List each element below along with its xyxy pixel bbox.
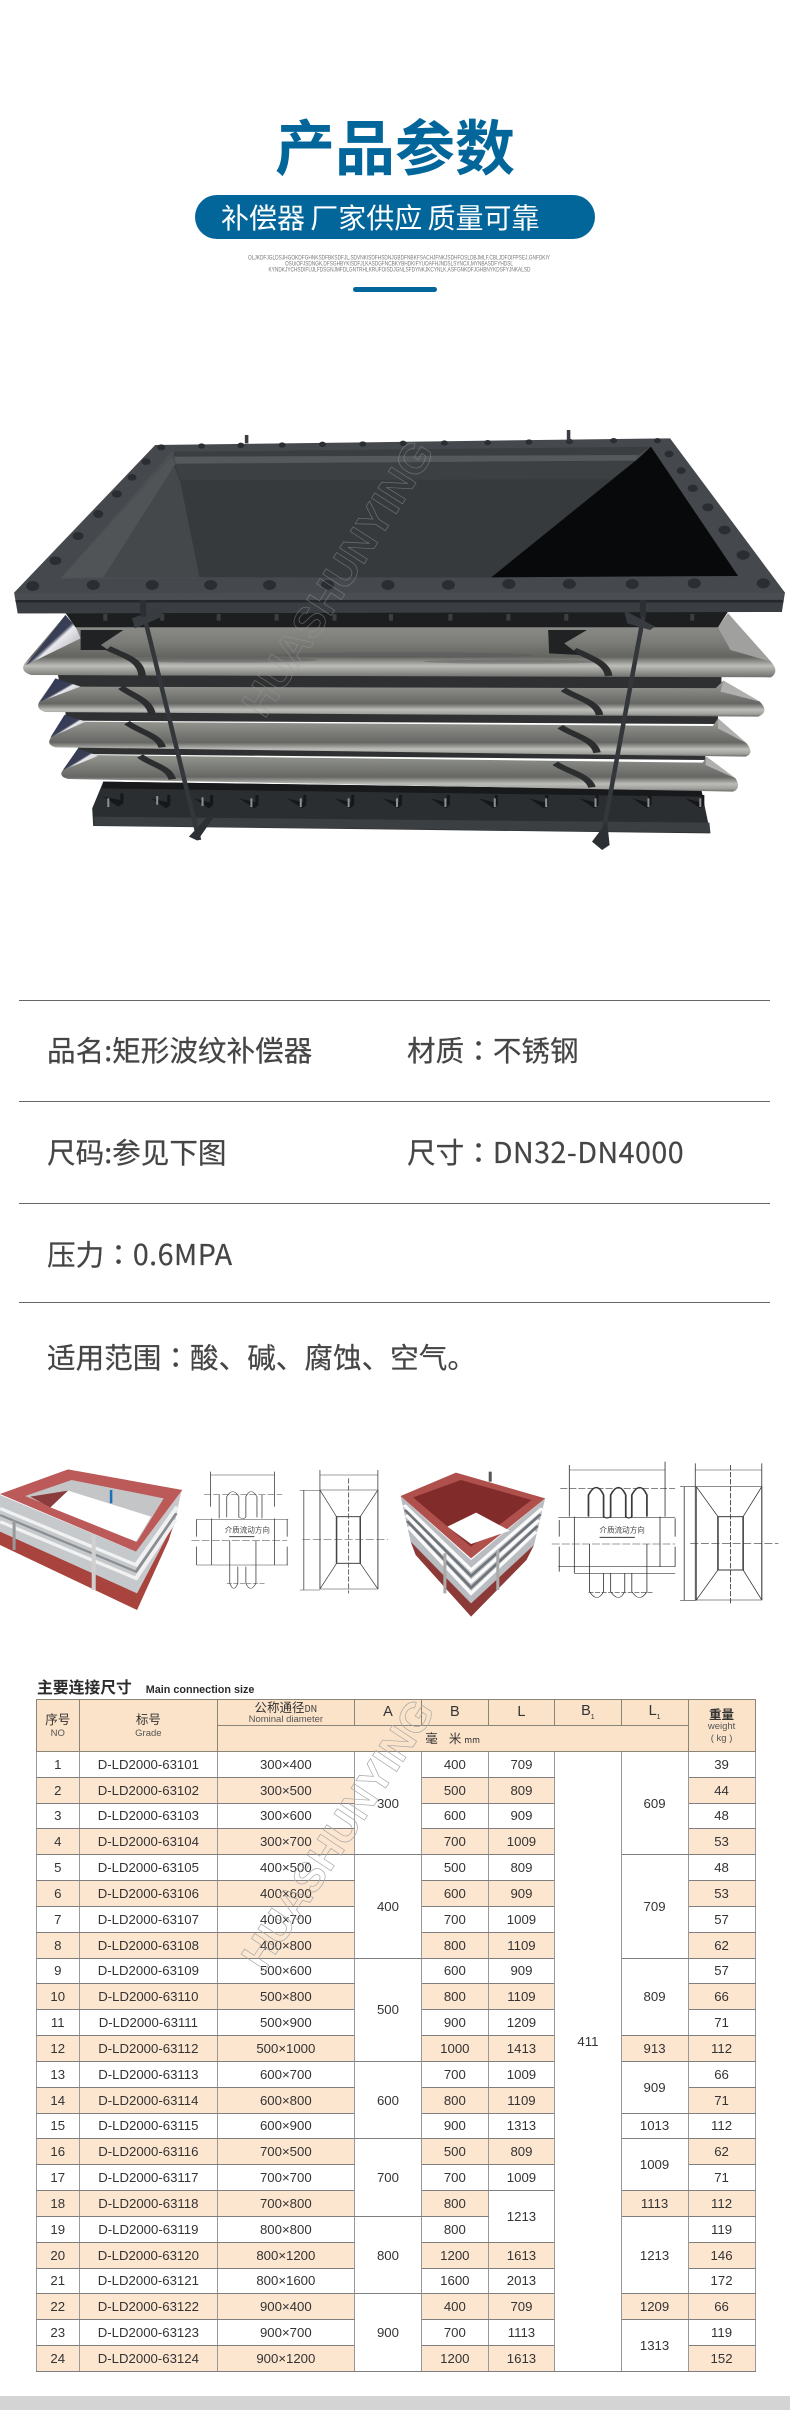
glossy corner reflections bbox=[26, 615, 81, 665]
table body: 1109 bbox=[507, 1989, 536, 2004]
table body: 23 bbox=[50, 2325, 65, 2340]
table body: 14 bbox=[50, 2093, 65, 2108]
table body: D-LD2000-63121 bbox=[98, 2273, 199, 2288]
table body: 13 bbox=[50, 2067, 65, 2082]
collar with bolts bbox=[64, 612, 728, 627]
table body: 500 bbox=[444, 1783, 466, 1798]
table body: 1109 bbox=[507, 2093, 536, 2108]
table body: D-LD2000-63103 bbox=[98, 1808, 199, 1823]
table body: 112 bbox=[711, 2118, 732, 2133]
table body: 700 bbox=[444, 2170, 466, 2185]
table body: 809 bbox=[644, 1989, 666, 2004]
table body: 400×700 bbox=[260, 1912, 312, 1927]
table header: ( kg ) bbox=[711, 1733, 732, 1744]
table header: 标号 bbox=[136, 1709, 161, 1728]
table body: 500×800 bbox=[260, 1989, 312, 2004]
drawing: flange view (left) bbox=[300, 1470, 388, 1593]
table body: 112 bbox=[711, 2196, 732, 2211]
table body: 2 bbox=[54, 1783, 61, 1798]
table body: 411 bbox=[577, 2034, 598, 2049]
table body: D-LD2000-63111 bbox=[99, 2015, 198, 2030]
table body: 66 bbox=[714, 1989, 729, 2004]
small decorative caption bbox=[248, 254, 550, 274]
table body: 1009 bbox=[507, 1912, 536, 1927]
table body: D-LD2000-63109 bbox=[98, 1963, 199, 1978]
table body: D-LD2000-63113 bbox=[98, 2067, 198, 2082]
table body: 39 bbox=[714, 1757, 729, 1772]
table body: 1200 bbox=[440, 2351, 470, 2366]
table body: 800 bbox=[444, 2222, 466, 2237]
table body: D-LD2000-63105 bbox=[98, 1860, 199, 1875]
upper flange face bbox=[14, 438, 785, 613]
table body: D-LD2000-63106 bbox=[98, 1886, 199, 1901]
spec: pressure: 压力：0.6MPA bbox=[47, 1233, 233, 1274]
table body: 1313 bbox=[640, 2338, 669, 2353]
table body: 800×1200 bbox=[256, 2248, 315, 2263]
table body: 15 bbox=[50, 2118, 65, 2133]
table body: 300×400 bbox=[260, 1757, 312, 1772]
table body: D-LD2000-63110 bbox=[98, 1989, 198, 2004]
table body: 112 bbox=[711, 2041, 732, 2056]
lower flange bbox=[92, 782, 710, 833]
table body: 800×1600 bbox=[256, 2273, 315, 2288]
table header: B1 bbox=[581, 1703, 595, 1721]
table body: 1009 bbox=[507, 2067, 536, 2082]
spec: product name: 品名:矩形波纹补偿器 bbox=[47, 1029, 312, 1070]
bellows convolutions bbox=[23, 613, 775, 792]
table header bbox=[37, 1700, 755, 1751]
table body: 66 bbox=[714, 2299, 729, 2314]
table body: 609 bbox=[644, 1796, 666, 1811]
table body: D-LD2000-63114 bbox=[98, 2093, 198, 2108]
table body: 24 bbox=[50, 2351, 65, 2366]
table body: 700 bbox=[444, 1912, 466, 1927]
table body: 1 bbox=[54, 1757, 61, 1772]
table body: 400×600 bbox=[260, 1886, 312, 1901]
table body: 800 bbox=[444, 2093, 466, 2108]
photo: wide red compensator bbox=[0, 1469, 182, 1610]
table body: 1209 bbox=[507, 2015, 536, 2030]
table body: 5 bbox=[54, 1860, 61, 1875]
table body: 300×600 bbox=[260, 1808, 312, 1823]
table body: 1213 bbox=[507, 2209, 536, 2224]
table body: 2013 bbox=[507, 2273, 536, 2288]
table body: 1413 bbox=[507, 2041, 536, 2056]
table body: 71 bbox=[714, 2015, 729, 2030]
table body: 400 bbox=[377, 1899, 399, 1914]
watermark on table: HUASHUNYING bbox=[232, 1691, 444, 1977]
table body: 1313 bbox=[507, 2118, 536, 2133]
table body: 900×400 bbox=[260, 2299, 312, 2314]
table body: 909 bbox=[510, 1808, 532, 1823]
table header: Grade bbox=[135, 1728, 162, 1738]
table body: 1600 bbox=[440, 2273, 470, 2288]
table body: 11 bbox=[51, 2015, 65, 2030]
table body: D-LD2000-63123 bbox=[98, 2325, 199, 2340]
table body: 62 bbox=[714, 1938, 729, 1953]
table body: 1000 bbox=[440, 2041, 470, 2056]
table body: 700 bbox=[377, 2170, 399, 2185]
pill text: 补偿器 厂家供应 质量可靠 bbox=[221, 197, 540, 237]
table body: 700 bbox=[444, 2067, 466, 2082]
table header: 毫 米 mm bbox=[425, 1728, 480, 1747]
table body: 10 bbox=[50, 1989, 65, 2004]
table body: D-LD2000-63102 bbox=[98, 1783, 199, 1798]
table body: 19 bbox=[50, 2222, 65, 2237]
table body: 909 bbox=[510, 1963, 532, 1978]
table header: Nominal diameter bbox=[249, 1714, 323, 1725]
photo: tall red compensator bbox=[401, 1472, 545, 1617]
table body: 900 bbox=[444, 2015, 466, 2030]
table body: 1200 bbox=[440, 2248, 470, 2263]
table body: 53 bbox=[714, 1886, 729, 1901]
table body: 700×500 bbox=[260, 2144, 312, 2159]
table body: 1113 bbox=[641, 2196, 668, 2211]
table body: D-LD2000-63116 bbox=[98, 2144, 198, 2159]
table header: weight bbox=[708, 1721, 735, 1732]
table body: 300 bbox=[377, 1796, 399, 1811]
table body: 800 bbox=[444, 2196, 466, 2211]
table body: 48 bbox=[714, 1860, 729, 1875]
divider lines bbox=[19, 1000, 770, 1303]
table body: 71 bbox=[714, 2093, 729, 2108]
table body: 300×700 bbox=[260, 1834, 312, 1849]
table body: D-LD2000-63117 bbox=[98, 2170, 198, 2185]
label: medium flow direction (left): 介质流动方向 bbox=[225, 1524, 270, 1535]
table body: 900 bbox=[377, 2325, 399, 2340]
table body: 600×800 bbox=[260, 2093, 312, 2108]
accent bar bbox=[353, 287, 437, 292]
table body: 500×1000 bbox=[256, 2041, 315, 2056]
table body bbox=[37, 1757, 755, 2371]
table header: B bbox=[450, 1704, 460, 1720]
table body: 909 bbox=[644, 2080, 666, 2095]
table body: 1209 bbox=[640, 2299, 669, 2314]
table body: 48 bbox=[714, 1808, 729, 1823]
table body: 809 bbox=[510, 1860, 532, 1875]
table body: 700 bbox=[444, 2325, 466, 2340]
bottom grey band bbox=[0, 2396, 790, 2410]
drawing: two-wave section bbox=[191, 1472, 288, 1588]
table body: 44 bbox=[714, 1783, 729, 1798]
spec: size code: 尺码:参见下图 bbox=[47, 1131, 227, 1172]
table body: 800 bbox=[377, 2248, 399, 2263]
table body: D-LD2000-63115 bbox=[98, 2118, 198, 2133]
table header: L bbox=[517, 1704, 526, 1720]
table body: 900×1200 bbox=[256, 2351, 315, 2366]
table body: 1009 bbox=[507, 1834, 536, 1849]
table body: D-LD2000-63122 bbox=[98, 2299, 199, 2314]
table body: 22 bbox=[50, 2299, 65, 2314]
label: medium flow direction (right): 介质流动方向 bbox=[600, 1524, 645, 1535]
strap brackets bbox=[81, 630, 587, 655]
table body: D-LD2000-63120 bbox=[98, 2248, 199, 2263]
table body: 800 bbox=[444, 1989, 466, 2004]
table body: 1113 bbox=[508, 2325, 535, 2340]
table body: 1013 bbox=[640, 2118, 669, 2133]
table body: D-LD2000-63118 bbox=[98, 2196, 198, 2211]
table body: 152 bbox=[711, 2351, 733, 2366]
table header: NO bbox=[51, 1728, 65, 1738]
table body: 300×500 bbox=[260, 1783, 312, 1798]
table body: 600×700 bbox=[260, 2067, 312, 2082]
table body: 1613 bbox=[507, 2248, 536, 2263]
table body: 172 bbox=[711, 2273, 733, 2288]
table body: 600×900 bbox=[260, 2118, 312, 2133]
table body: 900 bbox=[444, 2118, 466, 2133]
table body: 809 bbox=[510, 1783, 532, 1798]
table body: 700 bbox=[444, 1834, 466, 1849]
table body: 16 bbox=[50, 2144, 65, 2159]
table body: 57 bbox=[714, 1963, 729, 1978]
watermark on product photo: HUASHUNYING bbox=[233, 432, 444, 725]
table body: 4 bbox=[54, 1834, 61, 1849]
table body: 400×800 bbox=[260, 1938, 312, 1953]
table body: 500×900 bbox=[260, 2015, 312, 2030]
table body: 809 bbox=[510, 2144, 532, 2159]
subtitle pill bbox=[195, 195, 595, 239]
table body: 900×700 bbox=[260, 2325, 312, 2340]
table header: A bbox=[383, 1704, 393, 1720]
table body: 9 bbox=[54, 1963, 61, 1978]
product photo: rectangular bellows compensator bbox=[14, 430, 786, 850]
table body: 400 bbox=[444, 2299, 466, 2314]
table body: 600 bbox=[444, 1808, 466, 1823]
table body: 17 bbox=[50, 2170, 65, 2185]
corrugation shadows bbox=[58, 675, 721, 760]
table body: 8 bbox=[54, 1938, 61, 1953]
table body: 500 bbox=[444, 2144, 466, 2159]
table body: 1213 bbox=[640, 2248, 669, 2263]
table body: 909 bbox=[510, 1886, 532, 1901]
drawing: flange view (right) bbox=[680, 1463, 778, 1603]
table body: 1009 bbox=[640, 2157, 669, 2172]
table body: D-LD2000-63104 bbox=[98, 1834, 199, 1849]
table body: 800×800 bbox=[260, 2222, 312, 2237]
table body: 1613 bbox=[507, 2351, 536, 2366]
table body: 913 bbox=[644, 2041, 666, 2056]
table heading: 主要连接尺寸 Main connection size bbox=[37, 1675, 254, 1698]
table body: 21 bbox=[50, 2273, 65, 2288]
table body: 146 bbox=[711, 2248, 733, 2263]
table body: D-LD2000-63108 bbox=[98, 1938, 199, 1953]
table body: 709 bbox=[644, 1899, 666, 1914]
table body: 18 bbox=[50, 2196, 65, 2211]
table body: 500×600 bbox=[260, 1963, 312, 1978]
table body: 500 bbox=[377, 2002, 399, 2017]
table body: 53 bbox=[714, 1834, 729, 1849]
table body: 6 bbox=[54, 1886, 61, 1901]
table body: 7 bbox=[54, 1912, 61, 1927]
drawing: three-wave section bbox=[552, 1462, 675, 1598]
table header: L1 bbox=[649, 1703, 661, 1721]
welding stains bbox=[126, 652, 605, 664]
spec: material: 材质：不锈钢 bbox=[407, 1029, 579, 1070]
table header: 序号 bbox=[45, 1709, 70, 1728]
table body: 700×800 bbox=[260, 2196, 312, 2211]
spec: dimensions: 尺寸：DN32-DN4000 bbox=[407, 1131, 684, 1172]
table body: D-LD2000-63107 bbox=[98, 1912, 199, 1927]
table body: 709 bbox=[510, 1757, 532, 1772]
table body: 12 bbox=[50, 2041, 65, 2056]
table body: 3 bbox=[54, 1808, 61, 1823]
table body: 700×700 bbox=[260, 2170, 312, 2185]
table body: 800 bbox=[444, 1938, 466, 1953]
table body: 62 bbox=[714, 2144, 729, 2159]
flange opening bbox=[60, 447, 738, 579]
table body: D-LD2000-63119 bbox=[98, 2222, 198, 2237]
table body: 500 bbox=[444, 1860, 466, 1875]
table body: 1109 bbox=[507, 1938, 536, 1953]
table body: 709 bbox=[510, 2299, 532, 2314]
table body: 400 bbox=[444, 1757, 466, 1772]
table body: 600 bbox=[444, 1963, 466, 1978]
table body: 400×500 bbox=[260, 1860, 312, 1875]
table body: 1009 bbox=[507, 2170, 536, 2185]
tie rods bbox=[132, 430, 655, 850]
table body: 20 bbox=[50, 2248, 65, 2263]
table body: 57 bbox=[714, 1912, 729, 1927]
main connection size table bbox=[36, 1699, 756, 2372]
table body: D-LD2000-63101 bbox=[98, 1757, 199, 1772]
table body: D-LD2000-63112 bbox=[98, 2041, 198, 2056]
table body: 600 bbox=[377, 2093, 399, 2108]
table body: 119 bbox=[711, 2222, 732, 2237]
table body: 71 bbox=[714, 2170, 729, 2185]
flange bolt holes bbox=[26, 438, 770, 591]
table header: 重量 bbox=[709, 1704, 734, 1723]
table body: 119 bbox=[711, 2325, 732, 2340]
table body: 600 bbox=[444, 1886, 466, 1901]
table body: 66 bbox=[714, 2067, 729, 2082]
welded straps bbox=[108, 648, 609, 787]
title: 产品参数 bbox=[275, 101, 515, 188]
table body: D-LD2000-63124 bbox=[98, 2351, 199, 2366]
product images and technical drawings bbox=[0, 1462, 778, 1617]
spec: applicable range: 适用范围：酸、碱、腐蚀、空气。 bbox=[47, 1336, 476, 1377]
